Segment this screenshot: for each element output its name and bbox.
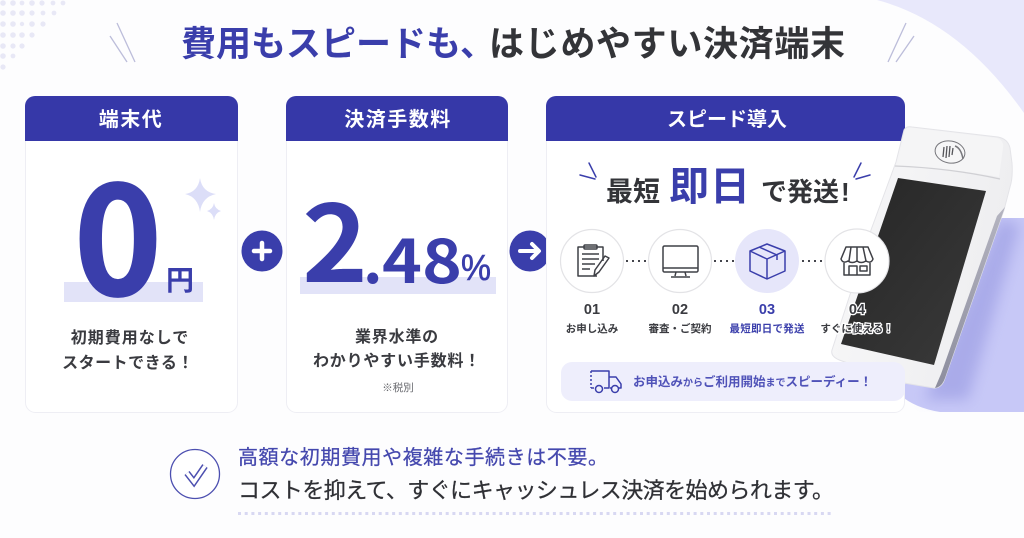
big number 2.48% xyxy=(302,159,491,313)
icon: store xyxy=(825,229,889,293)
step 3: shipping: 03 xyxy=(759,302,775,318)
step 3: shipping: 最短即日で発送 xyxy=(730,321,805,336)
shortest same-day shipping headline: 即日 xyxy=(669,154,751,212)
step 2: review and contract: 02 xyxy=(672,302,688,318)
tax note: ※税別 xyxy=(382,380,414,395)
callout: speedy from application to start: お申込みからご利用開始までスピーディー！ xyxy=(633,371,872,390)
step 3: shipping xyxy=(730,229,805,336)
big number 2.48%: % xyxy=(461,247,491,288)
device side strip xyxy=(935,207,1005,388)
shortest same-day shipping headline: で発送 xyxy=(761,172,839,209)
device screen xyxy=(841,178,986,365)
panel header: device cost: 端末代 xyxy=(99,103,163,132)
title xyxy=(181,16,845,67)
big number 2.48%: 2 xyxy=(302,159,368,313)
summary text: 高額な初期費用や複雑な手続きは不要。 xyxy=(238,441,608,470)
icon: truck xyxy=(591,371,621,392)
panel: fee xyxy=(286,96,508,412)
title accent lines right xyxy=(888,23,914,62)
yen unit: 円 xyxy=(166,259,194,299)
icon: plus xyxy=(242,230,282,272)
step 1: application: お申し込み xyxy=(566,321,619,336)
description xyxy=(313,323,481,371)
highlight band xyxy=(300,277,496,294)
step 4: ready to use xyxy=(820,229,894,336)
panel: device cost xyxy=(25,96,238,412)
description: わかりやすい手数料！ xyxy=(313,347,481,371)
shadow under device xyxy=(925,218,1020,400)
shortest same-day shipping headline: 最短 xyxy=(606,170,660,209)
icon: arrow xyxy=(510,230,550,272)
icon: monitor xyxy=(648,230,712,292)
icon: check badge xyxy=(170,450,220,498)
headline accents xyxy=(580,163,870,179)
description: 初期費用なしで xyxy=(71,324,189,348)
big number 2.48%: . xyxy=(363,214,382,301)
panel header: fee: 決済手数料 xyxy=(344,103,452,132)
big number 0: 0 xyxy=(74,122,162,339)
background arc top right xyxy=(877,0,1024,113)
shortest same-day shipping headline xyxy=(606,154,850,212)
description xyxy=(62,324,194,373)
big number 2.48%: 48 xyxy=(382,214,462,301)
step 4: ready to use: 04 xyxy=(849,302,865,318)
panel: speedy introduction xyxy=(546,96,905,412)
panel header: speedy introduction xyxy=(546,96,905,141)
dot pattern top left xyxy=(0,0,65,70)
device head xyxy=(897,128,1003,177)
step 2: review and contract: 審査・ご契約 xyxy=(648,321,712,336)
step 1: application: 01 xyxy=(584,302,600,318)
title: 費用もスピードも、 xyxy=(181,16,495,67)
step 1: application xyxy=(560,230,624,336)
step 4: ready to use: すぐに使える！ xyxy=(820,321,894,336)
icon: sparkles xyxy=(185,178,221,220)
title accent lines left xyxy=(110,23,135,62)
title: はじめやすい決済端末 xyxy=(489,16,845,67)
panel header: speedy introduction: スピード導入 xyxy=(667,103,787,132)
callout: speedy from application to start xyxy=(561,362,905,401)
panel header: fee xyxy=(286,96,508,141)
dotted rule xyxy=(238,512,833,515)
summary text xyxy=(238,441,834,505)
step 2: review and contract xyxy=(648,230,712,336)
background block bottom right xyxy=(900,218,1024,412)
shortest same-day shipping headline: ! xyxy=(841,177,850,207)
summary text: コストを抑えて、すぐにキャッシュレス決済を始められます。 xyxy=(238,473,834,505)
highlight band xyxy=(64,282,203,302)
panel header: device cost xyxy=(25,96,238,141)
description: 業界水準の xyxy=(355,323,439,347)
device: payment terminal xyxy=(832,127,1012,388)
step connectors xyxy=(626,260,824,262)
contactless mark xyxy=(933,139,967,165)
icon: clipboard xyxy=(560,230,624,292)
icon: box xyxy=(735,229,799,293)
description: スタートできる！ xyxy=(62,349,194,373)
